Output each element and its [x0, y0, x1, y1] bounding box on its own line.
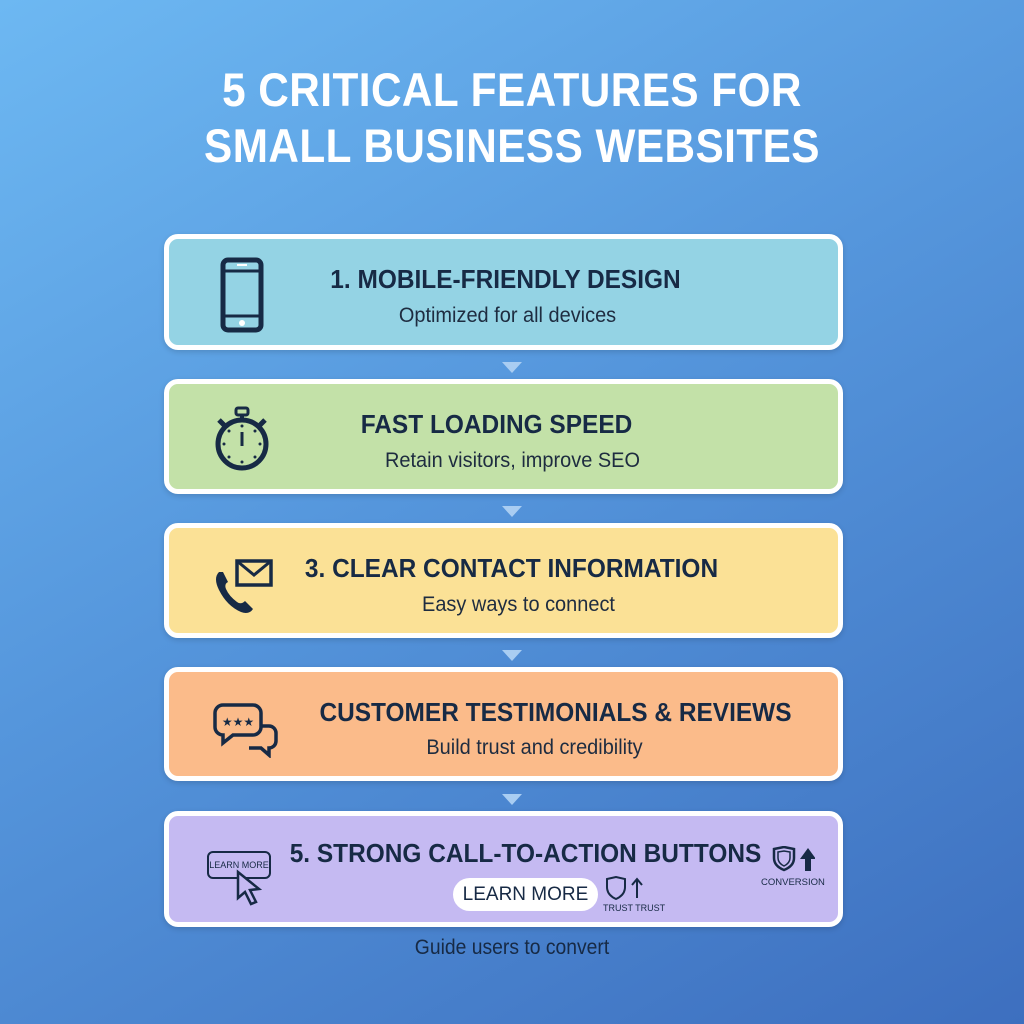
subtitle 3: Easy ways to connect — [422, 593, 615, 616]
card 3: contact — [164, 523, 843, 638]
card 1: mobile — [164, 234, 843, 350]
icon: speech bubbles: ★★★ — [222, 715, 254, 729]
caption: Guide users to convert — [415, 936, 609, 959]
card 5: CTA — [164, 811, 843, 927]
heading 4: CUSTOMER TESTIMONIALS & REVIEWS — [319, 697, 792, 727]
icon: phone and envelope — [216, 559, 273, 613]
button: learn more — [453, 878, 598, 911]
button: learn more: LEARN MORE — [463, 884, 588, 905]
subtitle 4: Build trust and credibility — [426, 736, 643, 759]
icon: stopwatch — [216, 406, 268, 470]
subtitle 1: Optimized for all devices — [399, 304, 616, 327]
heading 1: 1. MOBILE-FRIENDLY DESIGN — [330, 264, 681, 294]
icon: trust — [603, 876, 665, 913]
icon: learn more cursor: LEARN MORE — [209, 860, 269, 870]
heading 5: 5. STRONG CALL-TO-ACTION BUTTONS — [290, 838, 761, 868]
icon: trust: TRUST TRUST — [603, 903, 665, 913]
icon: phone — [220, 258, 264, 332]
card 4: testimonials — [164, 667, 843, 781]
icon: conversion — [761, 846, 825, 888]
icon: learn more cursor — [207, 851, 271, 906]
title — [204, 63, 820, 172]
subtitle 2: Retain visitors, improve SEO — [385, 449, 640, 472]
icon: speech bubbles — [213, 703, 278, 758]
heading 2: FAST LOADING SPEED — [361, 409, 632, 439]
icon: conversion: CONVERSION — [761, 877, 825, 888]
heading 3: 3. CLEAR CONTACT INFORMATION — [305, 553, 718, 583]
arrow — [502, 362, 522, 373]
title: 5 CRITICAL FEATURES FOR — [222, 63, 802, 116]
title: SMALL BUSINESS WEBSITES — [204, 119, 820, 172]
card 2: speed — [164, 379, 843, 494]
